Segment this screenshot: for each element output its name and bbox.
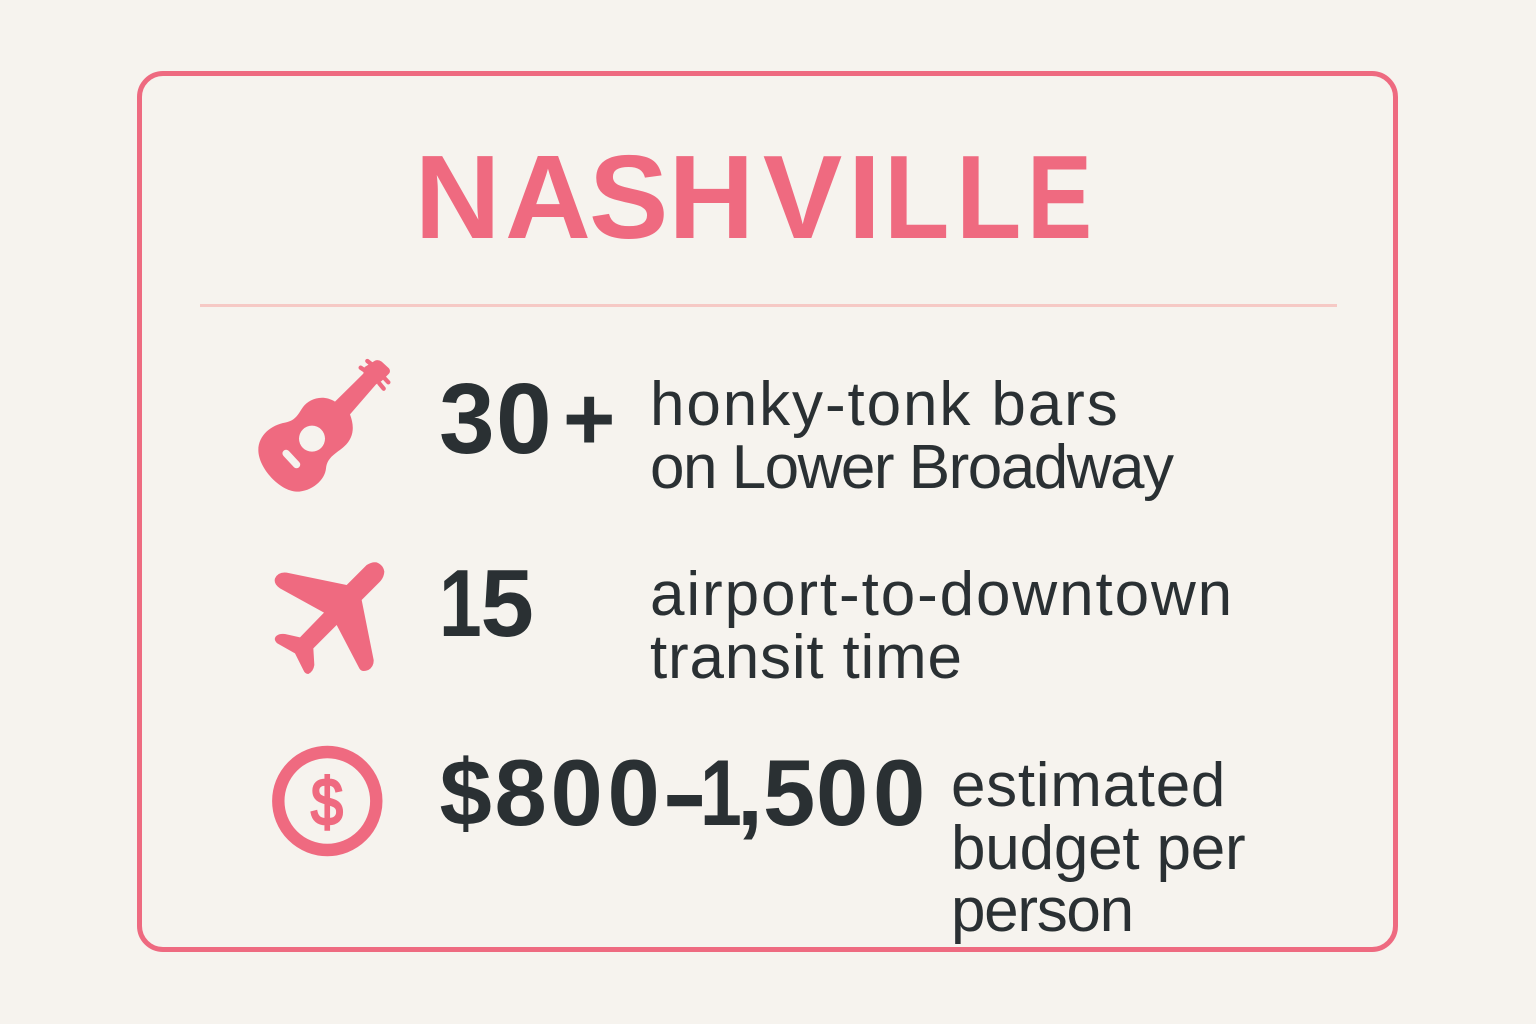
icon: dollar coin — [272, 746, 382, 856]
title — [415, 131, 1092, 264]
label: honky-tonk bars: on Lower Broadway — [650, 432, 1172, 502]
stat: budget: 1 — [700, 740, 742, 845]
label: budget per person — [951, 751, 1245, 945]
stat: budget: $800 ,500 — [440, 740, 925, 845]
icon: airplane — [274, 562, 384, 674]
icon: dollar coin: $ — [311, 765, 343, 840]
stat: 30+: 30 — [439, 363, 560, 475]
title: NASHVI — [415, 131, 884, 264]
label: airport transit: transit time — [650, 622, 963, 692]
stat: 15: 1 — [439, 550, 482, 657]
stat: 30+ — [439, 363, 615, 475]
label: honky-tonk bars — [650, 370, 1174, 502]
stat: 15 — [439, 550, 534, 657]
label: airport transit: airport-to-downtown — [650, 560, 1234, 629]
label: budget per person: person — [951, 876, 1133, 945]
title: L — [956, 131, 1022, 264]
panel: card border — [137, 71, 1398, 952]
label: budget per person: budget per — [951, 814, 1245, 882]
icon: guitar — [258, 358, 390, 492]
label: airport transit — [650, 560, 1234, 692]
stat: 30+: + — [563, 369, 615, 469]
label: budget per person: estimated — [951, 751, 1226, 820]
label: honky-tonk bars: honky-tonk bars — [650, 370, 1120, 439]
stat: budget: - — [662, 740, 707, 845]
title: L — [884, 131, 950, 264]
stat: 15: 5 — [480, 550, 534, 657]
title: E — [1027, 131, 1092, 264]
